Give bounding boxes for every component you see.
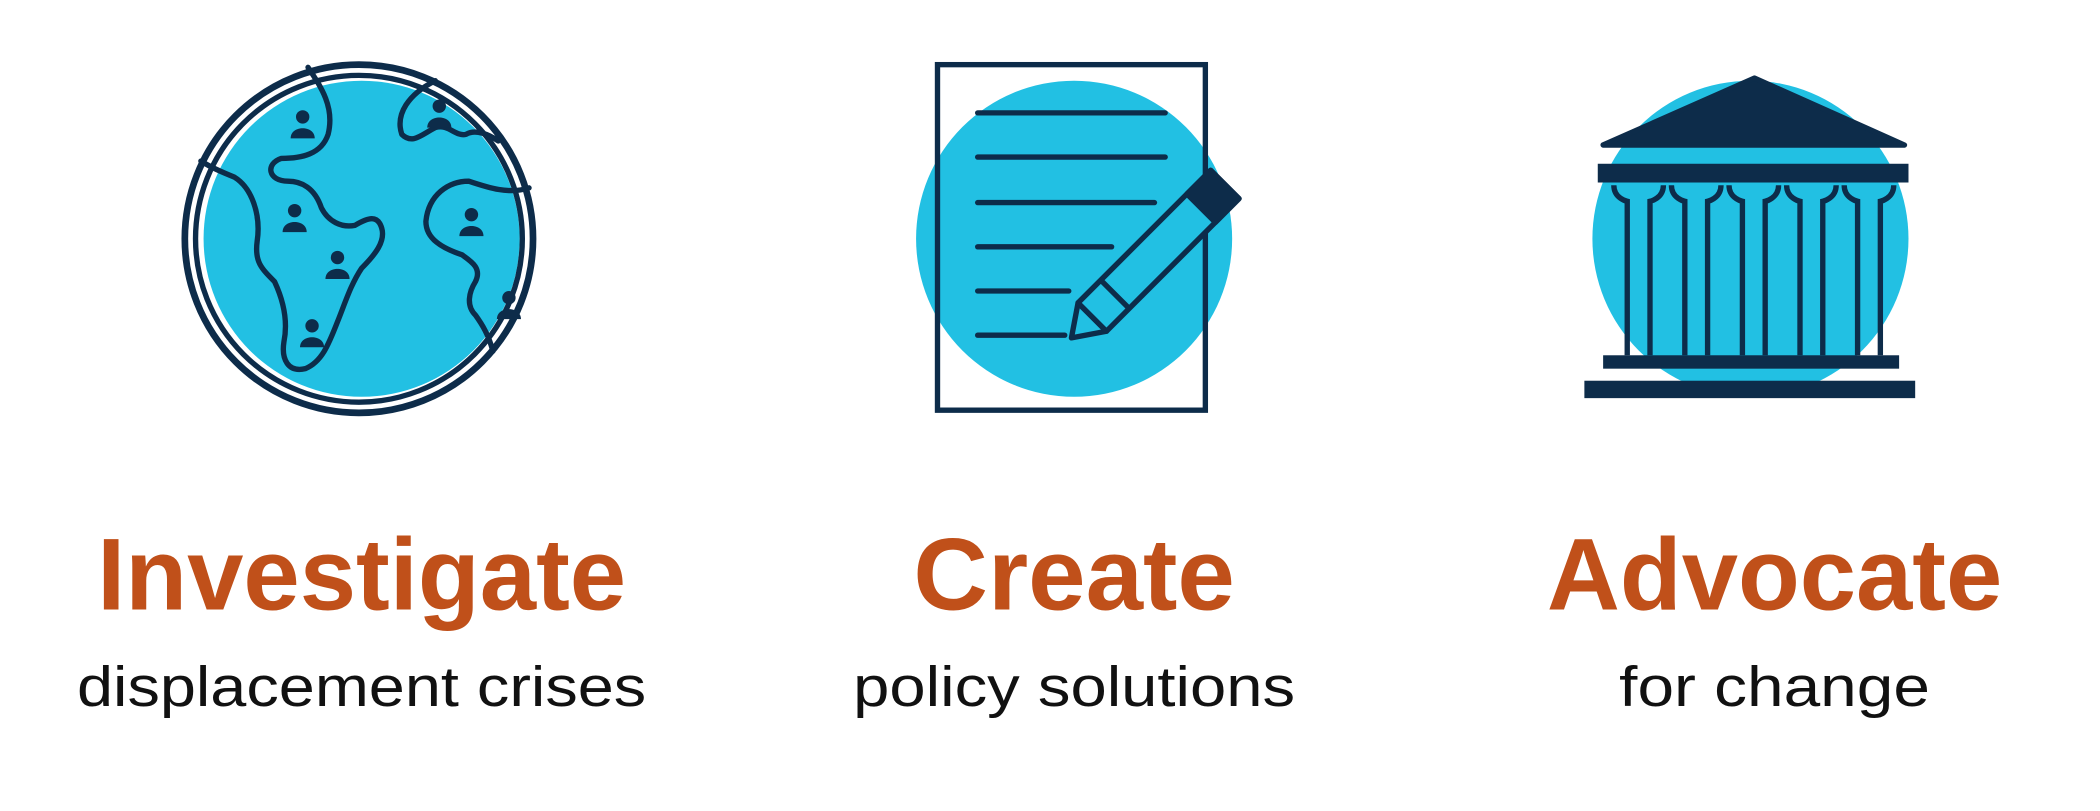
text: for change: for change: [1619, 655, 1930, 718]
heading: Create: Create: [913, 518, 1235, 632]
icon: document with pencil: [916, 65, 1239, 410]
text: displacement crises: displacement crises: [77, 655, 646, 718]
icon: government building: [1584, 78, 1915, 398]
text: policy solutions: policy solutions: [853, 655, 1295, 718]
icon: globe: [185, 65, 533, 413]
heading: Advocate: Advocate: [1547, 518, 2002, 632]
heading: Investigate: Investigate: [97, 518, 626, 632]
